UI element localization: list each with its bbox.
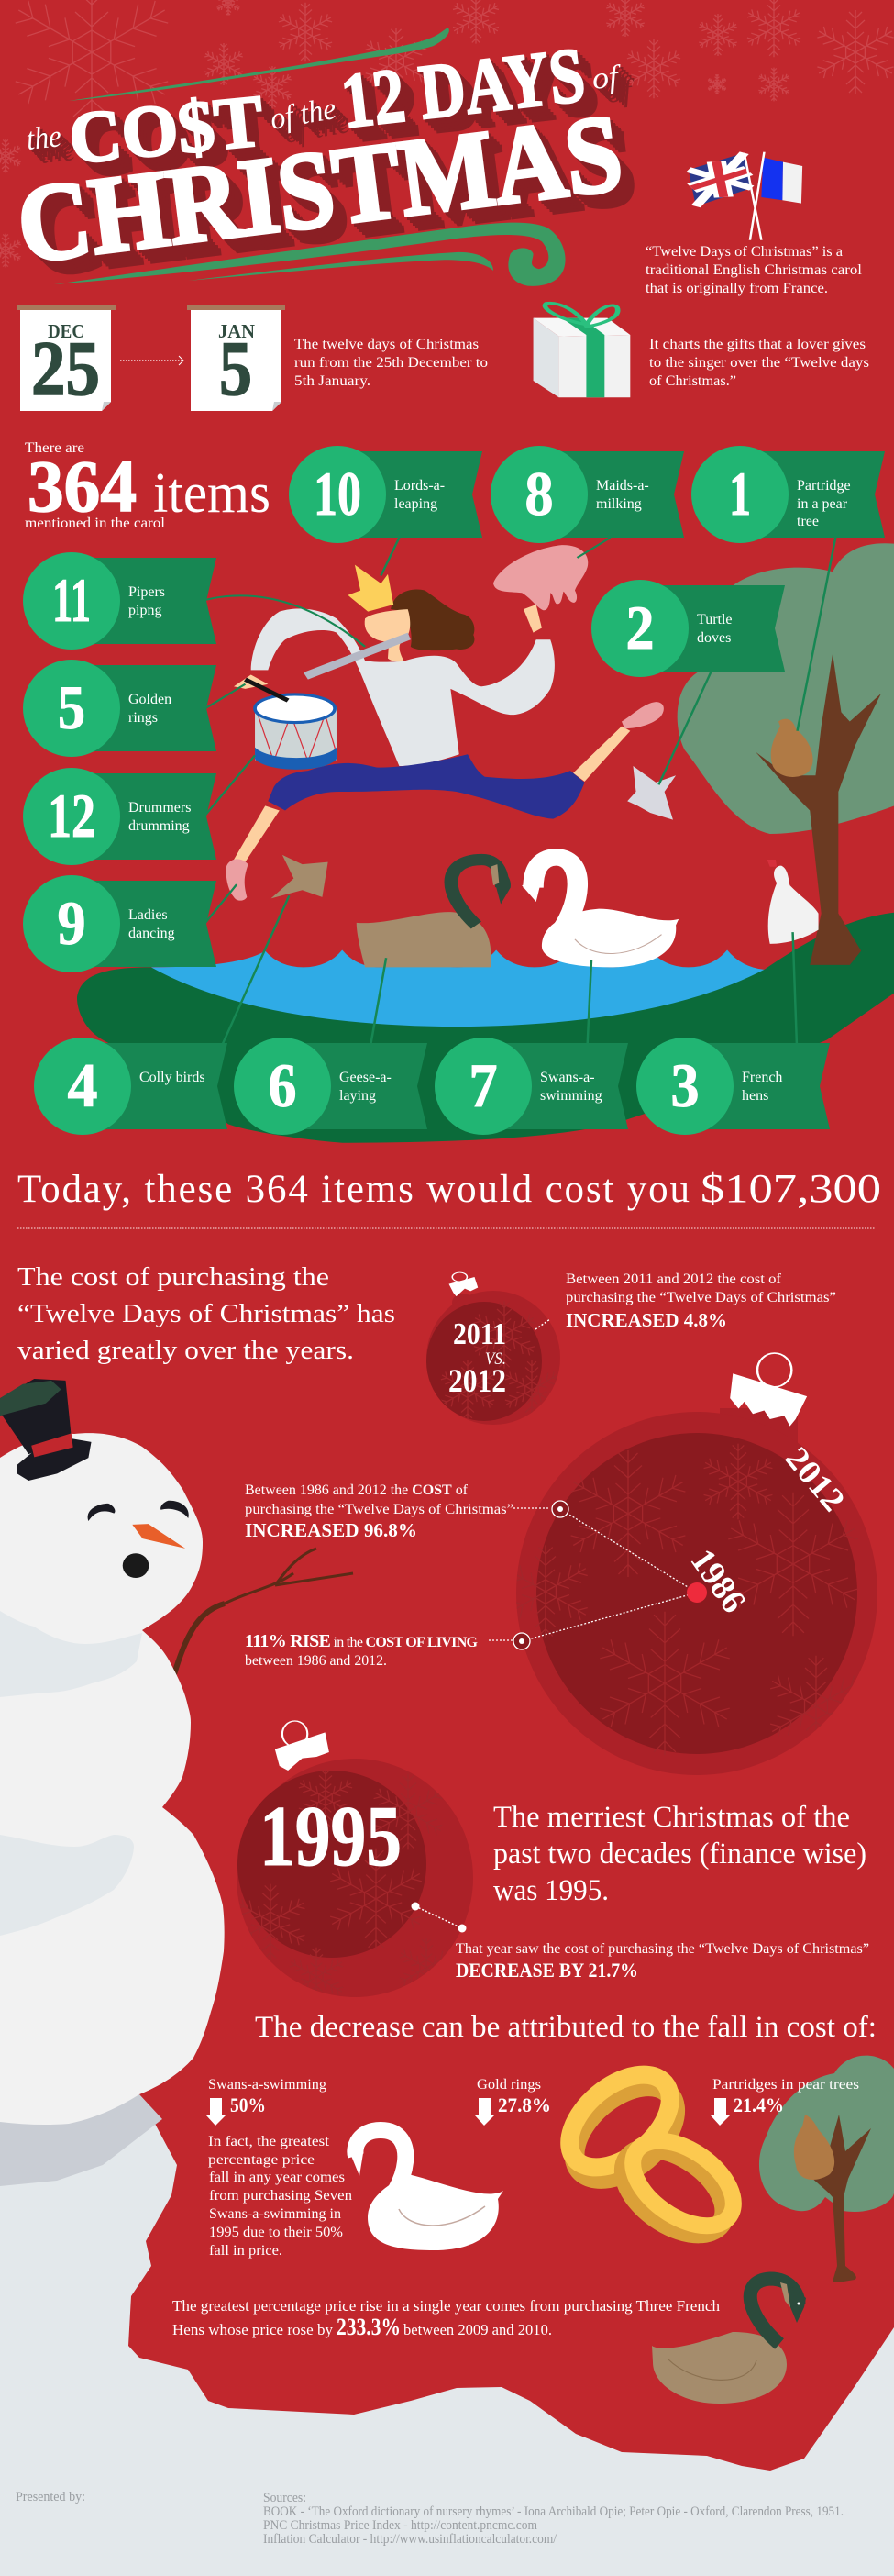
- hat, eyes, nose, mouth: [0, 1379, 189, 1578]
- title: of the: [268, 92, 338, 137]
- item 12: drummers: Drummers: [128, 800, 191, 816]
- text: 1986 to 2012 increase: purchasing the “Twelve Days of Christmas”: [245, 1502, 513, 1517]
- person: face: [365, 609, 410, 661]
- item 3: hens: 3: [671, 1050, 699, 1120]
- flute: [304, 633, 411, 680]
- item 4: colly birds: 4: [68, 1050, 97, 1120]
- item 5: rings: rings: [128, 710, 158, 726]
- text: french hens rise: [172, 2297, 720, 2340]
- snow bank: [0, 2094, 894, 2576]
- person: trousers: [268, 754, 585, 819]
- text: 1986 to 2012 increase: Between 1986 and 2012 the COST of: [245, 1482, 469, 1498]
- ornament: 1986 to 2012: 2012: [778, 1439, 853, 1518]
- person: sleeves and torso: [251, 608, 555, 766]
- item: partridges decrease: [711, 2077, 859, 2126]
- text: gifts: It charts the gifts that a lover gives: [649, 337, 866, 352]
- text: french hens rise: Hens whose price rose by: [172, 2321, 333, 2338]
- item 3: hens: [636, 1038, 830, 1135]
- item 12: drummers: drumming: [128, 818, 190, 834]
- item: partridges decrease: 21.4%: [734, 2093, 784, 2116]
- icon: crossed flags: [689, 152, 802, 240]
- headline: 364 items: mentioned in the carol: [25, 516, 166, 531]
- scarf shade: [0, 1611, 142, 1697]
- item 8: maids: 8: [524, 459, 554, 528]
- item 7: swans: swimming: [540, 1088, 602, 1104]
- item: gold rings decrease: 27.8%: [498, 2093, 551, 2116]
- item: swans decrease: from purchasing Seven: [209, 2188, 352, 2204]
- footer: sources: [263, 2491, 844, 2547]
- item 8: maids: [491, 446, 684, 543]
- calendar: Dec 25: 25: [31, 326, 100, 412]
- ornament: 1995: [234, 1721, 473, 2006]
- item 3: hens: French: [742, 1070, 782, 1085]
- text: cost of living: [245, 1631, 479, 1669]
- item 10: lords: leaping: [394, 496, 437, 512]
- item 11: pipers: [23, 552, 216, 650]
- item 1: partridge: in a pear: [797, 496, 848, 512]
- ornament: 2011 vs 2012: [426, 1272, 560, 1425]
- person: shoes: [622, 702, 664, 728]
- white swan: [542, 909, 679, 967]
- text: carol origin: “Twelve Days of Christmas” is a: [646, 244, 843, 260]
- item 10: lords: 10: [314, 459, 361, 528]
- text: carol origin: that is originally from France.: [646, 281, 828, 296]
- item: partridges decrease: Partridges in pear trees: [712, 2077, 859, 2093]
- tree trunk: [756, 654, 881, 965]
- text: 1986 to 2012 increase: INCREASED 96.8%: [245, 1519, 417, 1541]
- text: cost of living: between 1986 and 2012.: [245, 1653, 387, 1669]
- dove: [627, 766, 676, 820]
- item: swans decrease: 1995 due to their 50%: [209, 2225, 343, 2240]
- item 7: swans: [435, 1038, 628, 1135]
- text: french hens rise: between 2009 and 2010.: [403, 2321, 552, 2338]
- title: of: [590, 60, 624, 96]
- item: gold rings decrease: Gold rings: [477, 2077, 541, 2093]
- item: swans decrease: fall in any year comes: [209, 2170, 345, 2185]
- item 11: pipers: pipng: [128, 603, 161, 618]
- text: 1995 decrease: DECREASE BY 21.7%: [456, 1959, 638, 1982]
- item 4: colly birds: Colly birds: [139, 1070, 205, 1085]
- item 2: doves: 2: [625, 593, 655, 662]
- text: cost of living: 111% RISE in the COST OF LIVING: [245, 1631, 479, 1651]
- text: 2011 vs 2012 increase: Between 2011 and 2012 the cost of: [566, 1271, 782, 1287]
- footer: sources: PNC Christmas Price Index - http://content.pncmc.com: [263, 2518, 537, 2533]
- goose: [357, 912, 491, 967]
- text: 2011 vs 2012 increase: INCREASED 4.8%: [566, 1309, 727, 1331]
- text: date range: [294, 337, 488, 389]
- item 9: ladies: Ladies: [128, 907, 168, 923]
- item 6: geese: [234, 1038, 427, 1135]
- item 10: lords: Lords-a-: [394, 478, 445, 494]
- text: merriest christmas: was 1995.: [493, 1874, 609, 1907]
- text: date range: The twelve days of Christmas: [294, 337, 479, 352]
- udder: [493, 545, 588, 610]
- item 1: partridge: tree: [797, 514, 819, 529]
- item 2: doves: Turtle: [697, 612, 733, 627]
- text: 1986 to 2012 increase: [245, 1482, 513, 1541]
- title: CHRISTMAS: [11, 91, 628, 286]
- body: [0, 1433, 225, 2125]
- footer: sources: Inflation Calculator - http://www.usinflationcalculator.com/: [263, 2532, 557, 2547]
- green swooshes: [54, 28, 566, 286]
- item 8: maids: milking: [596, 496, 642, 512]
- text: cost varied: “Twelve Days of Christmas” has: [17, 1299, 395, 1328]
- text: 1995 decrease: [456, 1941, 869, 1982]
- item 5: rings: Golden: [128, 692, 171, 707]
- title: the: [25, 119, 63, 157]
- snowman: [0, 1379, 353, 2186]
- item 2: doves: doves: [697, 630, 731, 646]
- calendar: Dec 25: DEC: [48, 320, 84, 342]
- item 1: partridge: 1: [729, 459, 751, 528]
- item 12: drummers: [23, 768, 216, 865]
- person: hair: [391, 590, 474, 650]
- item: swans decrease: Swans-a-swimming: [208, 2077, 326, 2093]
- colly bird: [270, 855, 328, 898]
- hen: [768, 866, 819, 944]
- footer: presented by: Presented by:: [16, 2490, 85, 2504]
- item 7: swans: 7: [469, 1050, 497, 1120]
- item: gold rings decrease: [475, 2077, 551, 2126]
- item: swans decrease: Swans-a-swimming in: [209, 2206, 341, 2222]
- text: gifts: of Christmas.”: [649, 373, 736, 389]
- ornament: 2011 vs 2012: 2012: [448, 1362, 506, 1399]
- crown: [348, 565, 393, 612]
- ornament: 1995: 1995: [259, 1789, 402, 1884]
- text: french hens rise: 233.3%: [337, 2314, 401, 2340]
- headline: 364 items: [25, 440, 270, 531]
- belly shade: [0, 1835, 134, 1936]
- land: [77, 913, 894, 1143]
- item: swans decrease: percentage price: [208, 2152, 315, 2168]
- body shadow: [0, 2094, 162, 2186]
- snowflake pattern: [0, 0, 894, 267]
- item 6: geese: laying: [339, 1088, 376, 1104]
- item 4: colly birds: [34, 1038, 227, 1135]
- item 1: partridge: [691, 446, 885, 543]
- item 3: hens: hens: [742, 1088, 768, 1104]
- headline: total cost: $107,300: [701, 1166, 881, 1211]
- item 11: pipers: Pipers: [128, 584, 165, 600]
- text: gifts: to the singer over the “Twelve days: [649, 355, 869, 371]
- calendar: Dec 25: [17, 305, 116, 412]
- text: 1995 decrease: That year saw the cost of purchasing the “Twelve Days of Christmas”: [456, 1941, 869, 1957]
- text: cost varied: The cost of purchasing the: [17, 1262, 329, 1292]
- item: swans decrease: [206, 2077, 352, 2259]
- calendar: Jan 5: JAN: [218, 320, 255, 342]
- item: swans decrease: fall in price.: [209, 2243, 282, 2259]
- title: CO$T: [65, 81, 267, 180]
- item 6: geese: 6: [268, 1050, 297, 1120]
- icon: goose: [652, 2279, 806, 2404]
- text: carol origin: traditional English Christmas carol: [646, 262, 863, 278]
- calendar: Jan 5: 5: [219, 326, 252, 412]
- drum: [255, 707, 337, 760]
- text: carol origin: [646, 244, 863, 296]
- icon: partridge in pear tree: [759, 2056, 894, 2282]
- connectors: [205, 538, 835, 1045]
- heading: decrease attribution: The decrease can be attributed to the fall in cost of:: [255, 2011, 877, 2044]
- item 8: maids: Maids-a-: [596, 478, 649, 494]
- text: date range: 5th January.: [294, 373, 370, 389]
- item 7: swans: Swans-a-: [540, 1070, 595, 1085]
- text: 2011 vs 2012 increase: purchasing the “Twelve Days of Christmas”: [566, 1290, 836, 1305]
- ornament: 1986 to 2012: 1986: [683, 1542, 753, 1620]
- item: swans decrease: In fact, the greatest: [208, 2134, 330, 2149]
- water: [151, 950, 764, 1027]
- ornament: 2011 vs 2012: 2011: [453, 1317, 506, 1351]
- item 12: drummers: 12: [48, 781, 95, 850]
- arrow: dec to jan: [120, 356, 183, 365]
- icon: gold rings: [549, 2057, 748, 2252]
- text: cost varied: varied greatly over the years.: [17, 1336, 354, 1365]
- text: gifts: [649, 337, 869, 389]
- text: merriest christmas: [493, 1801, 866, 1907]
- headline: 364 items: 364: [28, 447, 137, 527]
- text: cost varied: [17, 1262, 395, 1365]
- icon: white swan: [348, 2130, 503, 2250]
- text: merriest christmas: The merriest Christmas of the: [493, 1801, 850, 1834]
- calendar: Jan 5: [187, 305, 285, 412]
- item 9: ladies: dancing: [128, 926, 175, 941]
- text: french hens rise: The greatest percentage price rise in a single year comes from purchasing Three French: [172, 2297, 720, 2315]
- item 9: ladies: [23, 875, 216, 972]
- arm: [174, 1549, 353, 1674]
- ornament: 2011 vs 2012: VS.: [485, 1349, 506, 1369]
- item 10: lords: [289, 446, 482, 543]
- tree foliage: [678, 543, 894, 834]
- icon: gift box: [534, 303, 630, 397]
- person: legs: [573, 727, 630, 782]
- headline: 364 items: There are: [25, 440, 84, 456]
- text: merriest christmas: past two decades (finance wise): [493, 1838, 866, 1871]
- item 5: rings: 5: [58, 672, 85, 742]
- text: 2011 vs 2012 increase: [566, 1271, 836, 1331]
- text: date range: run from the 25th December to: [294, 355, 488, 371]
- footer: sources: Sources:: [263, 2491, 306, 2505]
- item: swans decrease: 50%: [230, 2093, 266, 2116]
- headline: 364 items: items: [153, 462, 270, 525]
- partridge: [771, 719, 813, 777]
- title: 12 DAYS: [337, 31, 589, 145]
- item 6: geese: Geese-a-: [339, 1070, 392, 1085]
- item 9: ladies: 9: [57, 888, 86, 958]
- headline: total cost: Today, these 364 items would cost you: [17, 1168, 690, 1211]
- scene: land, tree and water: [77, 538, 894, 1143]
- ornament: 1986 to 2012: [489, 1353, 877, 1775]
- item 11: pipers: 11: [52, 565, 91, 635]
- item 1: partridge: Partridge: [797, 478, 851, 494]
- item 2: doves: [591, 580, 785, 677]
- item 5: rings: [23, 660, 216, 757]
